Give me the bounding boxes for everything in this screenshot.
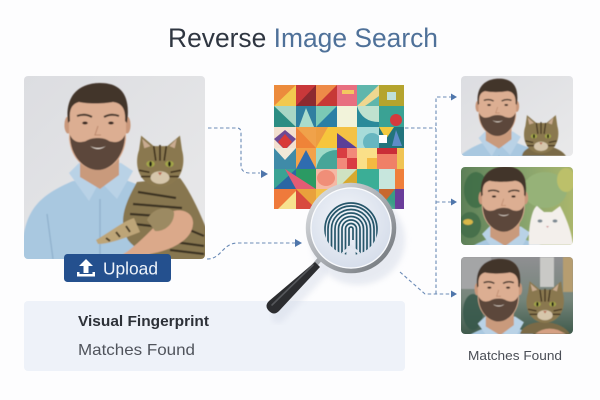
icon: upload arrow bbox=[77, 259, 95, 276]
panel heading: Visual Fingerprint: Visual Fingerprint bbox=[78, 314, 209, 330]
handle bbox=[313, 259, 320, 267]
match 2: garden photo with white cat bbox=[461, 167, 573, 245]
info panel bbox=[24, 301, 405, 371]
fingerprint bbox=[325, 203, 377, 256]
match 1: studio photo bbox=[461, 76, 573, 156]
arrows: mosaic to matches bbox=[400, 97, 451, 294]
geometric mosaic image hash bbox=[274, 85, 404, 209]
uploaded photo: man holding cat bbox=[22, 76, 206, 264]
upload button: Upload bbox=[103, 258, 158, 278]
matches found caption: Matches Found bbox=[468, 349, 562, 363]
arrow: photo to mosaic bbox=[208, 128, 260, 173]
magnifying glass with fingerprint bbox=[266, 185, 405, 316]
match 3: street photo bbox=[461, 257, 573, 334]
panel text: Matches Found: Matches Found bbox=[78, 342, 195, 359]
upload button bbox=[64, 254, 171, 282]
arrow: photo to magnifier bbox=[207, 243, 295, 259]
title: Reverse Image Search bbox=[168, 23, 438, 53]
lens bbox=[308, 185, 394, 271]
